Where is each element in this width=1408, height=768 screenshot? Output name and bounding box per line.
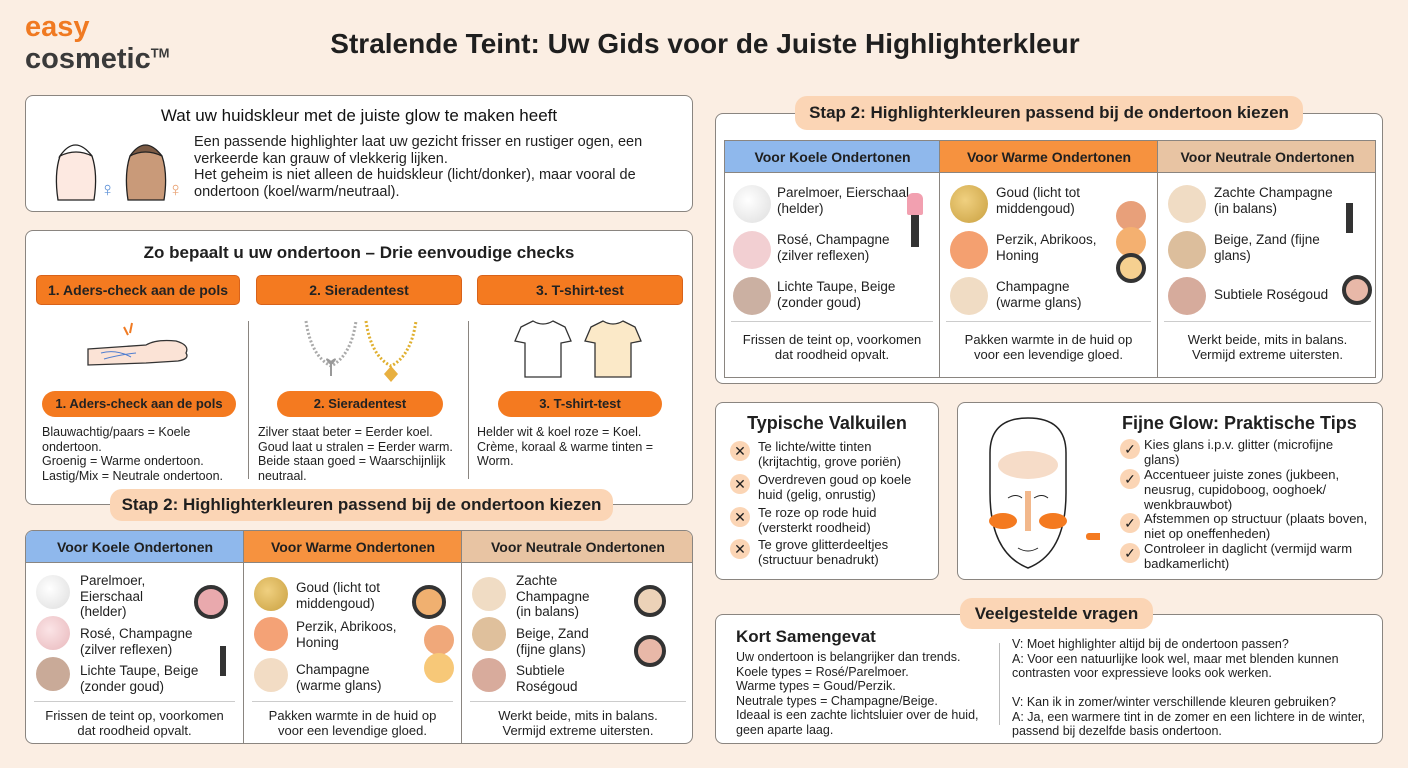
logo: cosmeticTM bbox=[25, 43, 170, 75]
panel: valkuilen bbox=[715, 402, 939, 580]
panel: tips bbox=[957, 402, 1383, 580]
text 1 bbox=[42, 425, 223, 482]
text 3: Crème, koraal & warme tinten = Worm. bbox=[477, 440, 653, 468]
column cool right: dat roodheid opvalt. bbox=[775, 347, 889, 362]
pill 3 bbox=[498, 391, 662, 417]
header warm: Voor Warme Ondertonen bbox=[271, 539, 435, 555]
panel: tips: Accentueer juiste zones (jukbeen, neusrug, cupidoboog, ooghoek/ wenkbrauwbot) bbox=[1144, 467, 1339, 512]
column neutral right: Vermijd extreme uitersten. bbox=[1192, 347, 1343, 362]
panel: valkuilen: Te lichte/witte tinten bbox=[758, 439, 871, 454]
text 1: Lastig/Mix = Neutrale ondertoon. bbox=[42, 468, 223, 482]
header warm right: Voor Warme Ondertonen bbox=[967, 149, 1131, 165]
column cool right: (zilver reflexen) bbox=[777, 248, 869, 262]
column cool: Rosé, Champagne bbox=[80, 626, 193, 641]
column cool right: (zonder goud) bbox=[777, 294, 861, 310]
column neutral right: Werkt beide, mits in balans. bbox=[1188, 332, 1347, 347]
logo: easy bbox=[25, 11, 90, 43]
heading: kort samengevat: Kort Samengevat bbox=[736, 627, 876, 646]
column cool right: Frissen de teint op, voorkomen bbox=[743, 332, 921, 347]
header cool bbox=[26, 531, 244, 563]
column warm: voor een levendige gloed. bbox=[278, 723, 427, 738]
column warm: Champagne bbox=[296, 662, 370, 677]
panel: valkuilen: (versterkt roodheid) bbox=[758, 520, 871, 535]
column cool: dat roodheid opvalt. bbox=[77, 723, 192, 738]
column warm: (warme glans) bbox=[296, 678, 382, 692]
panel: stap 2 right table bbox=[715, 113, 1383, 384]
pill: stap 2 left: Stap 2: Highlighterkleuren passend bij de ondertoon kiezen bbox=[122, 495, 601, 514]
text 3: Helder wit & koel roze = Koel. bbox=[477, 425, 641, 439]
column cool right: Rosé, Champagne bbox=[777, 232, 890, 247]
icon: two faces bbox=[56, 144, 180, 201]
text: faq: A: Ja, een warmere tint in de zomer en een lichtere in de winter, passend bij dezelfde basis ondertoon. bbox=[1012, 710, 1365, 738]
column neutral: Vermijd extreme uitersten. bbox=[502, 723, 654, 738]
column warm: Honing bbox=[296, 634, 339, 650]
pill 1: 1. Aders-check aan de pols bbox=[55, 396, 223, 411]
tab 1: 1. Aders-check aan de pols bbox=[48, 282, 228, 298]
tab 1 bbox=[36, 275, 240, 305]
panel: stap 2 left table bbox=[25, 530, 693, 744]
text 2: Goud laat u stralen = Eerder warm. bbox=[258, 440, 453, 454]
column neutral: (fijne glans) bbox=[516, 642, 586, 656]
text: faq: V: Kan ik in zomer/winter verschillende kleuren gebruiken? bbox=[1012, 695, 1336, 709]
column neutral right bbox=[1164, 185, 1372, 362]
column neutral bbox=[470, 573, 686, 738]
icon: wrist bbox=[87, 322, 188, 366]
list: tips bbox=[1120, 437, 1367, 571]
column cool: Eierschaal bbox=[80, 588, 143, 604]
pill 2 bbox=[277, 391, 443, 417]
column cool bbox=[34, 573, 235, 738]
header neutral bbox=[462, 531, 694, 563]
text: intro: Een passende highlighter laat uw gezicht frisser en rustiger ogen, een verkeerde kan grauw of vlekkerig lijken. bbox=[194, 134, 642, 166]
column neutral right: Subtiele Roségoud bbox=[1214, 287, 1328, 302]
column warm: Pakken warmte in de huid op bbox=[269, 708, 436, 723]
icon: face map bbox=[989, 417, 1100, 569]
text: summary: Uw ondertoon is belangrijker dan trends. bbox=[736, 650, 960, 664]
text: intro bbox=[194, 134, 642, 200]
text 2: Beide staan goed = Waarschijnlijk neutraal. bbox=[258, 454, 446, 482]
tab 2 bbox=[256, 275, 462, 305]
pill 1 bbox=[42, 391, 236, 417]
column warm: Perzik, Abrikoos, bbox=[296, 619, 397, 634]
header warm right bbox=[940, 141, 1158, 173]
header cool right: Voor Koele Ondertonen bbox=[754, 149, 911, 165]
column cool right: Parelmoer, Eierschaal bbox=[777, 185, 909, 200]
column warm: middengoud) bbox=[296, 596, 375, 610]
tab 3 bbox=[477, 275, 683, 305]
panel: tips: ✓ bbox=[1124, 515, 1136, 531]
column neutral: Zachte bbox=[516, 573, 557, 588]
pill: veelgestelde vragen: Veelgestelde vragen bbox=[975, 604, 1138, 623]
panel: valkuilen: ✕ bbox=[734, 509, 746, 525]
text: summary: Koele types = Rosé/Parelmoer. bbox=[736, 664, 909, 678]
tab 2: 2. Sieradentest bbox=[309, 282, 409, 298]
column warm: Goud (licht tot bbox=[296, 580, 380, 595]
column cool: Lichte Taupe, Beige bbox=[80, 663, 198, 678]
icon: necklaces bbox=[304, 320, 418, 382]
list: valkuilen bbox=[730, 439, 911, 567]
text: faq: V: Moet highlighter altijd bij de ondertoon passen? bbox=[1012, 637, 1289, 651]
column warm right bbox=[946, 185, 1151, 362]
column warm right: Pakken warmte in de huid op bbox=[965, 332, 1132, 347]
panel: valkuilen: ✕ bbox=[734, 443, 746, 459]
pill: stap 2 right: Stap 2: Highlighterkleuren passend bij de ondertoon kiezen bbox=[809, 103, 1289, 122]
column neutral right: Zachte Champagne bbox=[1214, 185, 1333, 200]
panel: tips: ✓ bbox=[1124, 441, 1136, 457]
column neutral: Beige, Zand bbox=[516, 626, 589, 641]
panel: valkuilen: Te roze op rode huid bbox=[758, 505, 877, 520]
header neutral: Voor Neutrale Ondertonen bbox=[491, 539, 665, 555]
column warm right: Perzik, Abrikoos, bbox=[996, 232, 1097, 247]
column neutral: (in balans) bbox=[516, 604, 579, 619]
header warm bbox=[244, 531, 462, 563]
text 1: Blauwachtig/paars = Koele ondertoon. bbox=[42, 425, 190, 454]
pill: stap 2 right bbox=[795, 96, 1303, 130]
column warm right: Honing bbox=[996, 248, 1039, 262]
text: summary: Neutrale types = Champagne/Beige. bbox=[736, 694, 938, 708]
text: summary bbox=[736, 650, 979, 736]
panel: valkuilen: Te grove glitterdeeltjes bbox=[758, 537, 888, 552]
column warm right: (warme glans) bbox=[996, 294, 1082, 310]
column cool: Parelmoer, bbox=[80, 573, 145, 588]
text: summary: Warme types = Goud/Perzik. bbox=[736, 679, 896, 693]
panel: valkuilen: huid (gelig, onrustig) bbox=[758, 487, 876, 502]
column cool: Frissen de teint op, voorkomen bbox=[45, 708, 224, 723]
column neutral: Champagne bbox=[516, 588, 590, 604]
panel: valkuilen: (structuur benadrukt) bbox=[758, 552, 879, 567]
header cool: Voor Koele Ondertonen bbox=[57, 539, 213, 555]
text 2 bbox=[258, 425, 453, 482]
heading: valkuilen: Typische Valkuilen bbox=[747, 413, 907, 433]
column cool right: (helder) bbox=[777, 200, 824, 216]
heading: intro: Wat uw huidskleur met de juiste glow te maken heeft bbox=[161, 106, 557, 125]
logo bbox=[25, 11, 170, 75]
panel: faq bbox=[715, 614, 1383, 744]
icon: two faces: ♀ bbox=[100, 179, 115, 201]
panel: checks bbox=[25, 230, 693, 505]
header neutral right bbox=[1158, 141, 1377, 173]
column cool right bbox=[731, 185, 933, 362]
column cool: (zonder goud) bbox=[80, 678, 164, 694]
panel: tips: Afstemmen op structuur (plaats boven, niet op oneffenheden) bbox=[1144, 511, 1367, 541]
column cool: (helder) bbox=[80, 604, 127, 619]
column warm right: voor een levendige gloed. bbox=[974, 347, 1123, 362]
pill 3: 3. T-shirt-test bbox=[539, 396, 621, 411]
panel: valkuilen: ✕ bbox=[734, 541, 746, 557]
text: intro: Het geheim is niet alleen de huidskleur (licht/donker), maar vooral de ondertoon (koel/warm/neutraal). bbox=[194, 167, 636, 200]
title: Stralende Teint: Uw Gids voor de Juiste Highlighterkleur bbox=[330, 28, 1080, 59]
column neutral: Subtiele bbox=[516, 663, 565, 678]
column neutral right: glans) bbox=[1214, 248, 1251, 262]
text: summary: Ideaal is een zachte lichtsluier over de huid, geen aparte laag. bbox=[736, 708, 979, 736]
panel: tips: ✓ bbox=[1124, 471, 1136, 487]
column neutral right: (in balans) bbox=[1214, 200, 1277, 216]
heading: checks: Zo bepaalt u uw ondertoon – Drie eenvoudige checks bbox=[144, 243, 574, 262]
column cool: (zilver reflexen) bbox=[80, 642, 172, 656]
text 2: Zilver staat beter = Eerder koel. bbox=[258, 425, 433, 439]
column warm right: middengoud) bbox=[996, 200, 1075, 216]
panel: tips: Controleer in daglicht (vermijd warm badkamerlicht) bbox=[1144, 541, 1352, 571]
column neutral right: Beige, Zand (fijne bbox=[1214, 232, 1320, 247]
panel: intro bbox=[25, 95, 693, 212]
column warm right: Goud (licht tot bbox=[996, 185, 1080, 200]
text: faq bbox=[1012, 637, 1365, 738]
text 3 bbox=[477, 425, 653, 468]
panel: tips: ✓ bbox=[1124, 545, 1136, 561]
panel: valkuilen: ✕ bbox=[734, 476, 746, 492]
tab 3: 3. T-shirt-test bbox=[536, 282, 624, 298]
panel: valkuilen: Overdreven goud op koele bbox=[758, 472, 911, 487]
column neutral: Werkt beide, mits in balans. bbox=[498, 708, 658, 723]
text: faq: A: Voor een natuurlijke look wel, maar met blenden kunnen contrasten voor expressieve looks ook werken. bbox=[1012, 652, 1339, 680]
pill 2: 2. Sieradentest bbox=[314, 396, 406, 411]
text 1: Groenig = Warme ondertoon. bbox=[42, 454, 204, 468]
header cool right bbox=[725, 141, 940, 173]
column warm right: Champagne bbox=[996, 279, 1070, 294]
pill: stap 2 left bbox=[110, 489, 613, 521]
header neutral right: Voor Neutrale Ondertonen bbox=[1180, 149, 1354, 165]
column warm bbox=[252, 577, 454, 738]
panel: valkuilen: (krijtachtig, grove poriën) bbox=[758, 454, 901, 469]
panel: tips: Kies glans i.p.v. glitter (microfijne glans) bbox=[1144, 437, 1333, 467]
column cool right: Lichte Taupe, Beige bbox=[777, 279, 895, 294]
column neutral: Roségoud bbox=[516, 678, 578, 694]
pill: veelgestelde vragen bbox=[960, 598, 1153, 629]
icon: t-shirts bbox=[514, 320, 642, 378]
heading: tips: Fijne Glow: Praktische Tips bbox=[1122, 413, 1357, 433]
